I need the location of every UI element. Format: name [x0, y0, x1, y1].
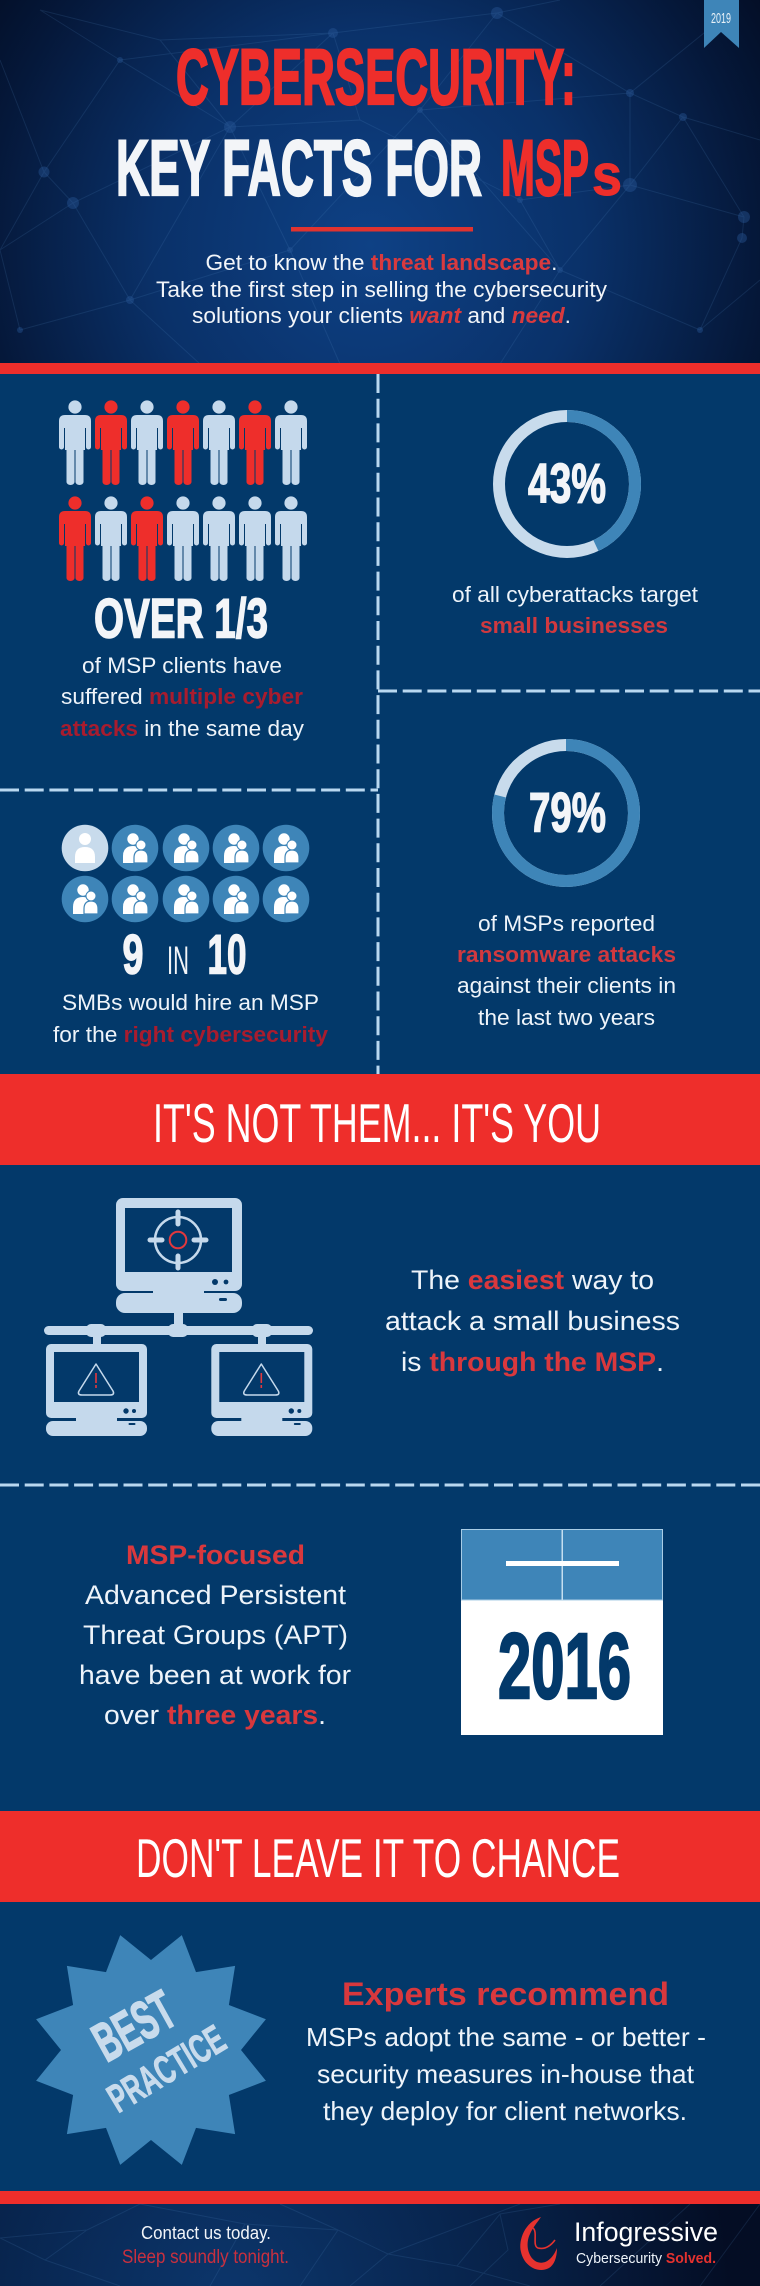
subtitle: solutions your clients want and need.: [192, 303, 571, 328]
icon: best practice badge: [36, 1935, 266, 2165]
logo: Infogressive: [520, 2217, 718, 2270]
stat: over 1/3: OVER 1/3: [94, 586, 268, 650]
stat: 9 in 10: 9: [122, 922, 144, 986]
title: KEY FACTS FOR: [116, 123, 482, 212]
text: ransomware attacks: of MSPs reported: [478, 911, 655, 936]
title: [116, 32, 622, 212]
subtitle: Get to know the threat landscape .: [206, 250, 558, 275]
text: small businesses: [452, 582, 698, 638]
text: SMBs: [53, 990, 329, 1047]
icon: best practice badge: PRACTICE: [100, 2017, 233, 2121]
subtitle: Take the first step in selling the cybersecurity: [156, 277, 607, 302]
text: experts recommend: security measures in-house that: [317, 2059, 695, 2089]
text: APT groups: MSP-focused: [126, 1540, 305, 1570]
stat: 9 in 10: [122, 922, 246, 986]
text: ransomware attacks: [457, 911, 676, 1030]
donut chart: 43%: [499, 416, 635, 552]
stat: 79%: 79%: [529, 780, 606, 844]
network background: [0, 0, 760, 364]
text: experts recommend: [306, 1976, 706, 2126]
text: MSP clients: attacks in the same day: [60, 716, 304, 741]
icon: main monitor with target: [116, 1198, 242, 1313]
text: SMBs: SMBs would hire an MSP: [62, 990, 319, 1015]
text: easiest way: [385, 1265, 680, 1377]
icon: best practice badge: BEST: [82, 1978, 186, 2073]
icon: left monitor with warning: [46, 1344, 147, 1436]
text: easiest way: attack a small business: [385, 1306, 680, 1336]
text: ransomware attacks: the last two years: [478, 1005, 655, 1030]
header panel: [0, 0, 760, 364]
bottom red bar: [0, 2191, 760, 2204]
banner: it's not them: [0, 1074, 760, 1165]
panel: over one third: [59, 400, 307, 741]
text: small businesses: of all cyberattacks target: [452, 582, 698, 607]
panel: 43 percent: [452, 416, 698, 638]
year ribbon: [704, 0, 739, 48]
year ribbon: 2019: [711, 10, 731, 27]
dashed dividers: [0, 374, 760, 1485]
icon: calendar 2016: 2016: [498, 1614, 631, 1718]
top red bar: [0, 363, 760, 374]
text: APT groups: [79, 1540, 351, 1730]
icon: compromised network: [44, 1198, 313, 1436]
stat: 9 in 10: 10: [208, 922, 246, 986]
text: APT groups: Threat Groups (APT): [83, 1620, 348, 1650]
contact text: Sleep soundly tonight.: [122, 2247, 289, 2268]
text: MSP clients: suffered multiple cyber: [61, 684, 303, 709]
text: ransomware attacks: ransomware attacks: [457, 942, 676, 967]
title: s: [592, 143, 622, 208]
text: experts recommend: they deploy for client networks.: [323, 2096, 687, 2126]
subtitle: [156, 250, 607, 328]
logo: Infogressive: Infogressive: [574, 2217, 718, 2247]
banner: don't leave it to chance: [0, 1811, 760, 1902]
stat: 43%: 43%: [528, 452, 606, 514]
footer network background: [0, 2204, 760, 2286]
icon: people circles: [62, 825, 309, 922]
text: MSP clients: [60, 653, 304, 741]
text: APT groups: Advanced Persistent: [85, 1580, 347, 1610]
footer panel: [0, 2204, 760, 2286]
text: APT groups: have been at work for: [79, 1660, 351, 1690]
text: easiest way: The easiest way to: [411, 1265, 654, 1295]
donut chart: 79%: [498, 745, 634, 881]
text: easiest way: is through the MSP .: [401, 1347, 664, 1377]
title: MSP: [501, 123, 589, 212]
icon: right monitor with warning: [211, 1344, 312, 1436]
panel: 9 in 10: [53, 825, 329, 1047]
text: ransomware attacks: against their clients in: [457, 973, 676, 998]
icon: people grid: [59, 400, 307, 581]
title rule: [291, 227, 473, 232]
contact text: [122, 2223, 289, 2268]
text: SMBs: for the right cybersecurity: [53, 1022, 329, 1047]
contact text: Contact us today.: [141, 2223, 271, 2243]
text: APT groups: over three years .: [104, 1700, 326, 1730]
stat: 9 in 10: IN: [167, 939, 189, 983]
text: MSP clients: of MSP clients have: [82, 653, 282, 678]
icon: calendar 2016: [461, 1530, 663, 1735]
text: experts recommend: MSPs adopt the same - or better -: [306, 2022, 706, 2052]
text: small businesses: small businesses: [480, 613, 668, 638]
network bus: [44, 1313, 313, 1345]
logo: Infogressive: Cybersecurity Solved.: [576, 2250, 716, 2267]
panel: 79 percent: [457, 745, 676, 1030]
text: experts recommend: Experts recommend: [342, 1976, 669, 2012]
